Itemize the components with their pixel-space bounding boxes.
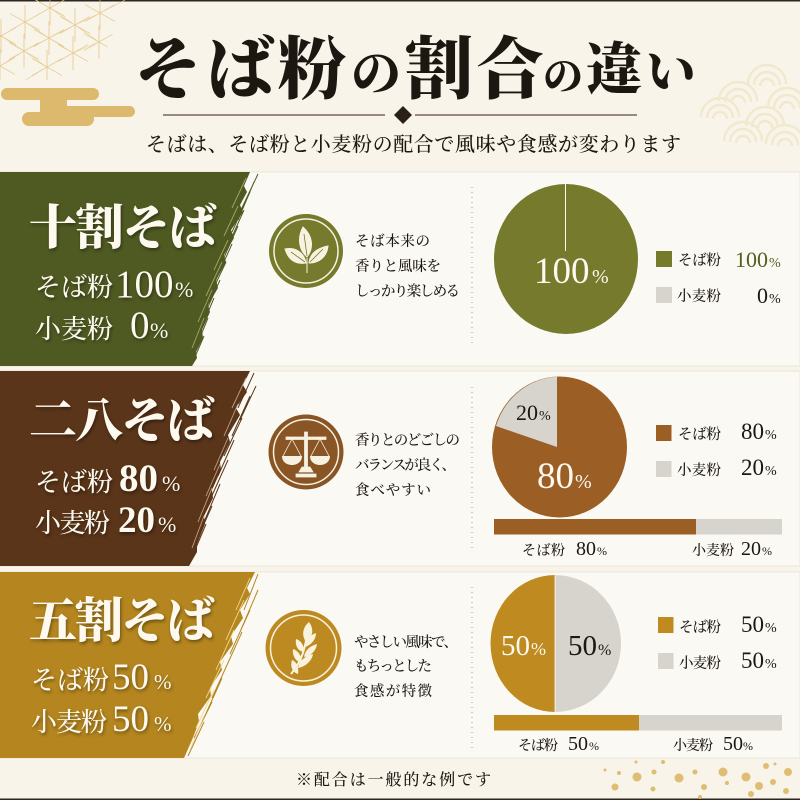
ratio: soba flour: そば粉: [31, 660, 109, 697]
legend: %: [769, 256, 781, 271]
title: 割: [403, 16, 473, 113]
legend: [656, 247, 781, 308]
ratio: wheat flour: %: [158, 512, 176, 537]
icon: leaves: [269, 214, 343, 288]
ratio: soba flour: [35, 263, 193, 306]
ratio: wheat flour: 50: [112, 699, 149, 740]
legend: %: [765, 657, 777, 672]
description: [354, 634, 458, 700]
ratio: wheat flour: 小麦粉: [35, 309, 113, 346]
panel: 十割そば: [0, 172, 800, 366]
legend: 80: [741, 419, 764, 444]
title: い: [646, 32, 696, 104]
pie chart: 50: [568, 630, 597, 662]
legend: %: [765, 464, 777, 479]
row background: [0, 172, 800, 366]
brush header band: [0, 371, 256, 566]
pie chart: 50: [501, 630, 530, 662]
pie chart: 20: [516, 400, 538, 425]
pie chart: 80: [537, 456, 574, 497]
legend: [656, 419, 777, 480]
ratio: soba flour: %: [175, 277, 193, 302]
legend: 50: [741, 612, 764, 637]
ratio: wheat flour: %: [154, 712, 172, 736]
panel: 五割そば: [0, 572, 800, 758]
stacked bar: 小麦粉: [692, 540, 734, 560]
stacked bar: [494, 715, 782, 755]
title: そ: [134, 16, 202, 113]
stacked bar: %: [762, 544, 772, 558]
pie chart: %: [598, 642, 611, 659]
title: の: [543, 45, 583, 102]
legend: そば粉: [679, 616, 722, 637]
stacked bar: そば粉: [518, 735, 558, 755]
description: やさしい風味で、: [354, 634, 458, 651]
decoration: gold asanoha pattern: [0, 0, 125, 84]
decoration: gold flecks: [604, 760, 792, 799]
legend: %: [769, 292, 781, 307]
title: の: [351, 34, 401, 106]
description: 食べやすい: [355, 482, 431, 499]
title: 違: [586, 26, 642, 106]
title: 粉: [278, 16, 346, 113]
pie chart: [494, 184, 638, 334]
ratio: soba flour: [35, 457, 180, 500]
ratio: soba flour: そば粉: [35, 267, 113, 304]
subtitle: そばは、そば粉と小麦粉の配合で風味や食感が変わります: [146, 128, 681, 157]
legend: 小麦粉: [677, 459, 722, 480]
decoration: seigaiha waves: [701, 65, 800, 146]
description: もちっとした: [354, 658, 432, 675]
pie chart: [491, 575, 621, 712]
description: 香りとのどごしの: [355, 432, 460, 449]
description: 香りと風味を: [355, 258, 441, 275]
ratio: soba flour: 50: [112, 657, 149, 698]
stacked bar: 80: [576, 538, 596, 560]
ratio: wheat flour: 0: [130, 304, 150, 347]
ratio: wheat flour: %: [150, 318, 168, 343]
ratio: wheat flour: [35, 304, 168, 347]
legend: 50: [741, 648, 764, 673]
heading: 二八そば: [29, 382, 215, 451]
legend: %: [765, 428, 777, 443]
heading: 十割そば: [29, 189, 217, 258]
description: [355, 232, 460, 300]
pie chart: 100: [534, 251, 590, 292]
ratio: soba flour: 80: [119, 457, 158, 500]
stacked bar: 20: [741, 538, 761, 560]
title: ば: [207, 16, 275, 113]
footnote: ※配合は一般的な例です: [296, 767, 491, 790]
legend: 小麦粉: [677, 285, 722, 306]
stacked bar: [494, 519, 782, 560]
ratio: wheat flour: 20: [118, 500, 155, 541]
description: 食感が特徴: [354, 682, 432, 700]
legend: 20: [741, 455, 764, 480]
panel: 二八そば: [0, 371, 800, 566]
stacked bar: 小麦粉: [673, 735, 713, 755]
legend: そば粉: [678, 423, 722, 444]
description: そば本来の: [355, 232, 430, 250]
legend: [658, 612, 777, 673]
ratio: wheat flour: 小麦粉: [31, 702, 107, 739]
brush header band: [0, 172, 258, 366]
pie chart: %: [575, 471, 592, 493]
stacked bar: 50: [723, 733, 743, 755]
ratio: soba flour: [31, 657, 172, 698]
stacked bar: %: [597, 544, 607, 558]
row background: [0, 572, 800, 758]
stacked bar: 50: [568, 733, 588, 755]
pie chart: %: [539, 409, 551, 424]
ratio: wheat flour: 小麦粉: [35, 503, 110, 540]
pie chart: [492, 376, 627, 518]
pie chart: %: [531, 639, 546, 659]
title divider with diamond: [163, 106, 637, 124]
title: 合: [476, 16, 544, 113]
ratio: wheat flour: [31, 699, 172, 740]
ratio: soba flour: 100: [115, 263, 174, 306]
legend: %: [765, 621, 777, 636]
brush header band: [0, 572, 258, 758]
icon: wheat: [266, 610, 342, 686]
icon: balance scale: [268, 414, 344, 490]
description: バランスが良く、: [355, 456, 456, 474]
description: しっかり楽しめる: [355, 283, 460, 300]
legend: そば粉: [678, 249, 722, 270]
ratio: soba flour: そば粉: [35, 462, 113, 499]
legend: 小麦粉: [679, 652, 722, 673]
row background: [0, 371, 800, 566]
decoration: gold cloud: [1, 88, 135, 126]
heading: 五割そば: [29, 582, 215, 651]
legend: 0: [757, 283, 768, 308]
description: [355, 432, 460, 499]
stacked bar: %: [589, 739, 599, 753]
stacked bar: そば粉: [522, 540, 565, 560]
legend: 100: [735, 247, 768, 272]
stacked bar: %: [743, 739, 753, 753]
ratio: soba flour: %: [162, 471, 180, 496]
ratio: soba flour: %: [154, 670, 172, 694]
ratio: wheat flour: [35, 500, 176, 541]
pie chart: %: [592, 266, 609, 288]
